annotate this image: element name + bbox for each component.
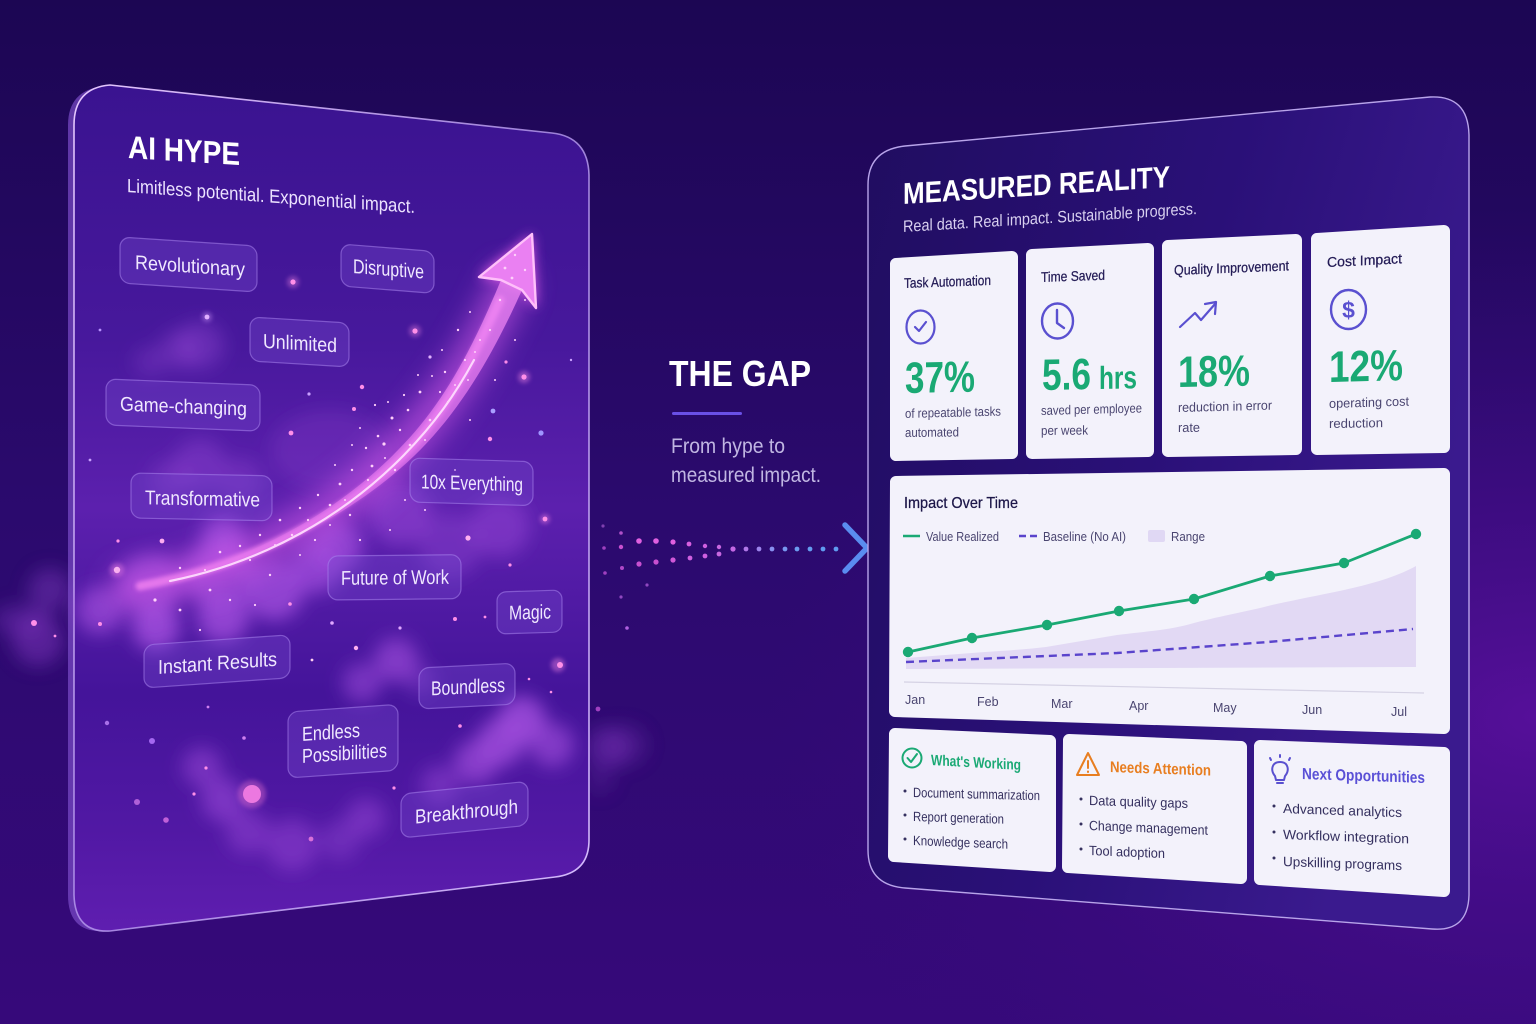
card shape <box>896 257 1012 455</box>
metric: 5.6 hrs: 5.6 <box>1042 350 1091 400</box>
card shape <box>1168 240 1296 451</box>
arrow dots <box>601 524 838 599</box>
month labels: Mar <box>1051 697 1073 711</box>
chart legend: Value Realized <box>926 530 999 544</box>
chart card shape <box>895 474 1444 728</box>
metric: 18%: 18% <box>1178 347 1250 397</box>
subtitle: reality: Real data. Real impact. Sustainable progress. <box>903 200 1197 236</box>
month labels: Jul <box>1391 705 1407 719</box>
month labels: Jan <box>905 693 925 707</box>
bullet list: Change management <box>1089 818 1208 838</box>
chip: Game-changing: Game-changing <box>120 394 247 421</box>
chip: Breakthrough <box>401 781 528 838</box>
icon: trend arrow <box>1180 302 1216 327</box>
bullet list <box>1080 793 1208 861</box>
card label: Cost Impact <box>1327 250 1402 270</box>
chevron arrow head <box>845 525 867 571</box>
metric: 37%: 37% <box>905 353 975 403</box>
chip: Magic <box>497 590 562 634</box>
bullet list: Document summarization <box>913 785 1040 803</box>
chart legend <box>903 530 1205 544</box>
bullet list: Tool adoption <box>1089 843 1165 861</box>
bullet list: Workflow integration <box>1283 827 1409 846</box>
icon: check circle <box>906 310 934 344</box>
month labels: Feb <box>977 695 999 709</box>
card: needs attention <box>1068 740 1241 878</box>
stars <box>31 276 629 841</box>
bullet list: Data quality gaps <box>1089 793 1188 811</box>
chip: Future of Work <box>328 555 461 600</box>
icon: green check <box>902 748 922 768</box>
chip: Endless Possibilities: Possibilities <box>302 740 387 768</box>
value realized line <box>908 534 1416 652</box>
card heading: What's Working <box>931 752 1021 774</box>
chip: Revolutionary: Revolutionary <box>135 252 245 281</box>
heading: AI HYPE: AI HYPE <box>128 129 240 172</box>
gap heading: THE GAP <box>669 353 811 394</box>
card: time saved <box>1032 249 1148 453</box>
arrow shaft <box>130 280 522 587</box>
chip: Future of Work: Future of Work <box>341 567 450 590</box>
metric unit: hrs <box>1099 359 1137 396</box>
arrowhead glow <box>479 234 536 308</box>
card shape <box>1068 740 1241 878</box>
clouds inside the panel <box>76 321 574 871</box>
icon: clock <box>1042 304 1073 338</box>
panel edge thickness <box>68 86 587 931</box>
card label: Task Automation <box>904 272 991 291</box>
chart title: Impact Over Time <box>904 495 1018 512</box>
chip: Disruptive <box>341 244 434 293</box>
glowing growth arrow <box>130 234 536 631</box>
card shape <box>1260 746 1444 891</box>
card description line 2: automated <box>905 424 959 440</box>
chip: Transformative <box>131 473 272 521</box>
chip: Instant Results <box>144 635 290 688</box>
baseline dashed line <box>906 629 1413 662</box>
dotted transition arrow <box>601 524 867 599</box>
card description line 2: reduction <box>1329 415 1383 431</box>
metric: 12%: 12% <box>1329 341 1403 392</box>
clouds spilling outside the hype panel <box>0 568 647 794</box>
range area <box>906 566 1416 669</box>
chip: Game-changing <box>106 379 260 431</box>
card label: Time Saved <box>1041 267 1105 285</box>
icon: dollar circle <box>1331 290 1366 329</box>
month labels: May <box>1213 701 1237 715</box>
the gap label <box>669 353 821 487</box>
arrow outer glow <box>130 285 510 588</box>
chip: 10x Everything <box>410 458 533 506</box>
heading: MEASURED REALITY: MEASURED REALITY <box>903 161 1170 211</box>
card shape <box>1317 231 1444 449</box>
chip: Endless Possibilities: Endless <box>302 720 360 746</box>
chip: Disruptive: Disruptive <box>353 256 424 284</box>
card shape <box>894 734 1050 866</box>
card label: Quality Improvement <box>1174 257 1289 278</box>
card heading: Next Opportunities <box>1302 766 1425 787</box>
card shape <box>1032 249 1148 453</box>
card description: reduction in error <box>1178 398 1273 415</box>
gap divider <box>672 412 742 415</box>
bullet list: Upskilling programs <box>1283 854 1402 873</box>
icon: light bulb <box>1270 755 1290 783</box>
chip: 10x Everything: 10x Everything <box>421 471 523 496</box>
month labels: Jun <box>1302 703 1322 717</box>
hype word chips <box>106 237 562 838</box>
card: task automation <box>896 257 1012 455</box>
bullet list: Knowledge search <box>913 833 1008 852</box>
panel body <box>74 85 589 931</box>
gap caption: measured impact. <box>671 464 821 487</box>
data points <box>903 529 1421 657</box>
chip: Unlimited <box>250 317 349 367</box>
sparkle dust <box>153 254 526 631</box>
icon: warning triangle <box>1077 753 1099 775</box>
gap caption: From hype to <box>671 435 785 458</box>
month labels: Apr <box>1129 699 1148 713</box>
panel: measured reality <box>868 97 1469 929</box>
subtitle: hype: Limitless potential. Exponential impact. <box>127 176 415 218</box>
chip: Breakthrough: Breakthrough <box>415 796 518 829</box>
bullet list: Advanced analytics <box>1283 801 1402 820</box>
bullet list <box>904 785 1040 852</box>
chart card: impact over time <box>895 474 1444 728</box>
panel: AI hype <box>31 85 629 931</box>
card description: of repeatable tasks <box>905 404 1001 421</box>
arrow head <box>479 234 536 308</box>
icon: dollar circle: $ <box>1342 297 1355 323</box>
bullet list <box>1272 801 1409 873</box>
chip: Endless Possibilities <box>288 704 398 778</box>
chip: Boundless <box>419 663 515 709</box>
chart legend: Baseline (No AI) <box>1043 530 1126 544</box>
bullet list: Report generation <box>913 809 1004 827</box>
chip: Unlimited: Unlimited <box>263 331 337 357</box>
chip: Transformative: Transformative <box>145 487 260 512</box>
chip: Instant Results: Instant Results <box>158 649 277 679</box>
chip: Boundless: Boundless <box>431 675 505 700</box>
arrow mid glow <box>140 300 500 586</box>
card heading: Needs Attention <box>1110 759 1211 780</box>
chip: Revolutionary <box>120 237 257 292</box>
card: next opportunities <box>1260 746 1444 891</box>
card description line 2: per week <box>1041 423 1088 438</box>
card description: operating cost <box>1329 394 1409 411</box>
card: quality improvement <box>1168 240 1296 451</box>
card description line 2: rate <box>1178 420 1200 435</box>
x axis <box>904 682 1424 693</box>
arrow core line <box>170 360 474 581</box>
card: what's working <box>894 734 1050 866</box>
panel body <box>868 97 1469 929</box>
chart legend: Range <box>1171 530 1205 544</box>
card description: saved per employee <box>1041 400 1142 418</box>
month labels <box>905 693 1407 719</box>
card: cost impact <box>1317 231 1444 449</box>
chip: Magic: Magic <box>509 601 551 625</box>
